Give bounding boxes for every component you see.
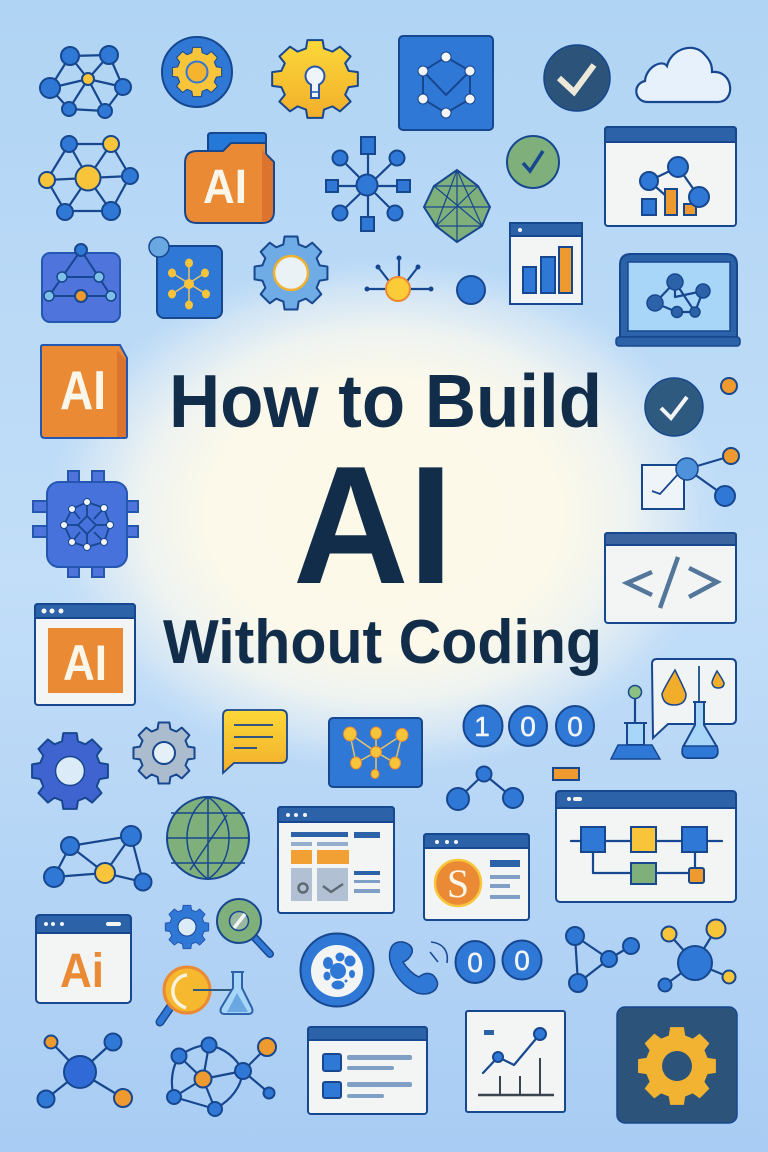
icon: blue square with hexagon network [399, 36, 493, 130]
icon: lab stand [611, 686, 660, 759]
icon: hub with spokes [326, 137, 410, 231]
icon: green magnifier [217, 899, 270, 954]
icon: dark check circle with dot [645, 378, 737, 436]
icon: S badge window [424, 834, 529, 920]
icon: blue ring with cluster [300, 934, 374, 1006]
icon: number circles 1 0 0 [464, 706, 594, 746]
title: How to Build: How to Build [169, 359, 602, 443]
icon: green globe [167, 797, 249, 879]
icon: checkbox with nodes [642, 448, 739, 509]
icon: flask [682, 666, 718, 758]
icon: list window [308, 1027, 427, 1114]
icon: dashboard window [278, 807, 394, 913]
title: Without Coding: Without Coding [163, 608, 602, 677]
icon: speech bubble with drops [652, 659, 736, 738]
icon: number circles 0 0: 0 [467, 947, 483, 978]
icon: triangle graph [566, 927, 639, 992]
icon: AI window: AI [63, 635, 107, 691]
icon: code window [605, 533, 736, 623]
icon: yellow node burst [364, 256, 434, 301]
icon: yellow speech bubble [223, 710, 287, 773]
icon: AI window [35, 604, 135, 705]
icon: dark blue gear [32, 733, 108, 809]
icon: phone [390, 942, 447, 994]
icon: laptop with network [616, 254, 740, 346]
icon: network with yellow centre [40, 46, 131, 118]
icon: triangle network on blue tile [42, 244, 120, 322]
icon: blue tile with yellow star network [149, 237, 222, 318]
icon: yellow magnifier [160, 967, 232, 1022]
icon: number circles 1 0 0: 0 [520, 711, 536, 742]
icon: mesh network [167, 1038, 276, 1116]
icon: number circles 0 0: 0 [514, 945, 530, 976]
icon: four-arm hub [38, 1034, 132, 1108]
icon: AI chip [33, 471, 138, 577]
icon: three-node graph [447, 766, 523, 810]
icon: line chart card [466, 1011, 565, 1112]
icon: number circles 1 0 0: 1 [474, 711, 490, 742]
icon: number circles 1 0 0: 0 [567, 711, 583, 742]
icon: AI folder: AI [203, 161, 247, 214]
icon: flowchart window [556, 791, 736, 902]
icon: green polyhedron [424, 170, 490, 242]
icon: Ai window: Ai [60, 945, 104, 998]
icon: Ai window [36, 915, 131, 1003]
icon: cloud [636, 48, 730, 102]
icon: small blue gear [165, 905, 209, 949]
icon: small lab flask [220, 972, 252, 1014]
icon: S badge window: S [447, 861, 469, 906]
title: AI: AI [293, 431, 453, 619]
icon: blue dot [457, 276, 485, 304]
icon: AI document [41, 345, 127, 438]
icon: small orange tag [553, 768, 579, 780]
icon: green check circle [507, 136, 559, 188]
icon: blue tile with yellow network [329, 718, 422, 787]
icon: number circles 0 0 [456, 940, 542, 983]
icon: AI document: AI [60, 359, 106, 421]
icon: five-node network [44, 826, 152, 890]
icon: yellow gear with light bulb [272, 40, 358, 118]
icon: network with yellow nodes [39, 136, 138, 220]
icon: bar chart window [510, 223, 582, 304]
icon: hub with yellow nodes [658, 920, 736, 992]
icon: window with nodes and bars [605, 127, 736, 226]
icon: gear in blue circle [162, 37, 232, 107]
icon: dark tile with yellow gear [617, 1007, 737, 1123]
icon: dark check circle [544, 45, 610, 111]
icon: light blue gear [255, 237, 327, 309]
icon: AI folder [185, 133, 274, 223]
icon: grey gear [133, 722, 195, 784]
